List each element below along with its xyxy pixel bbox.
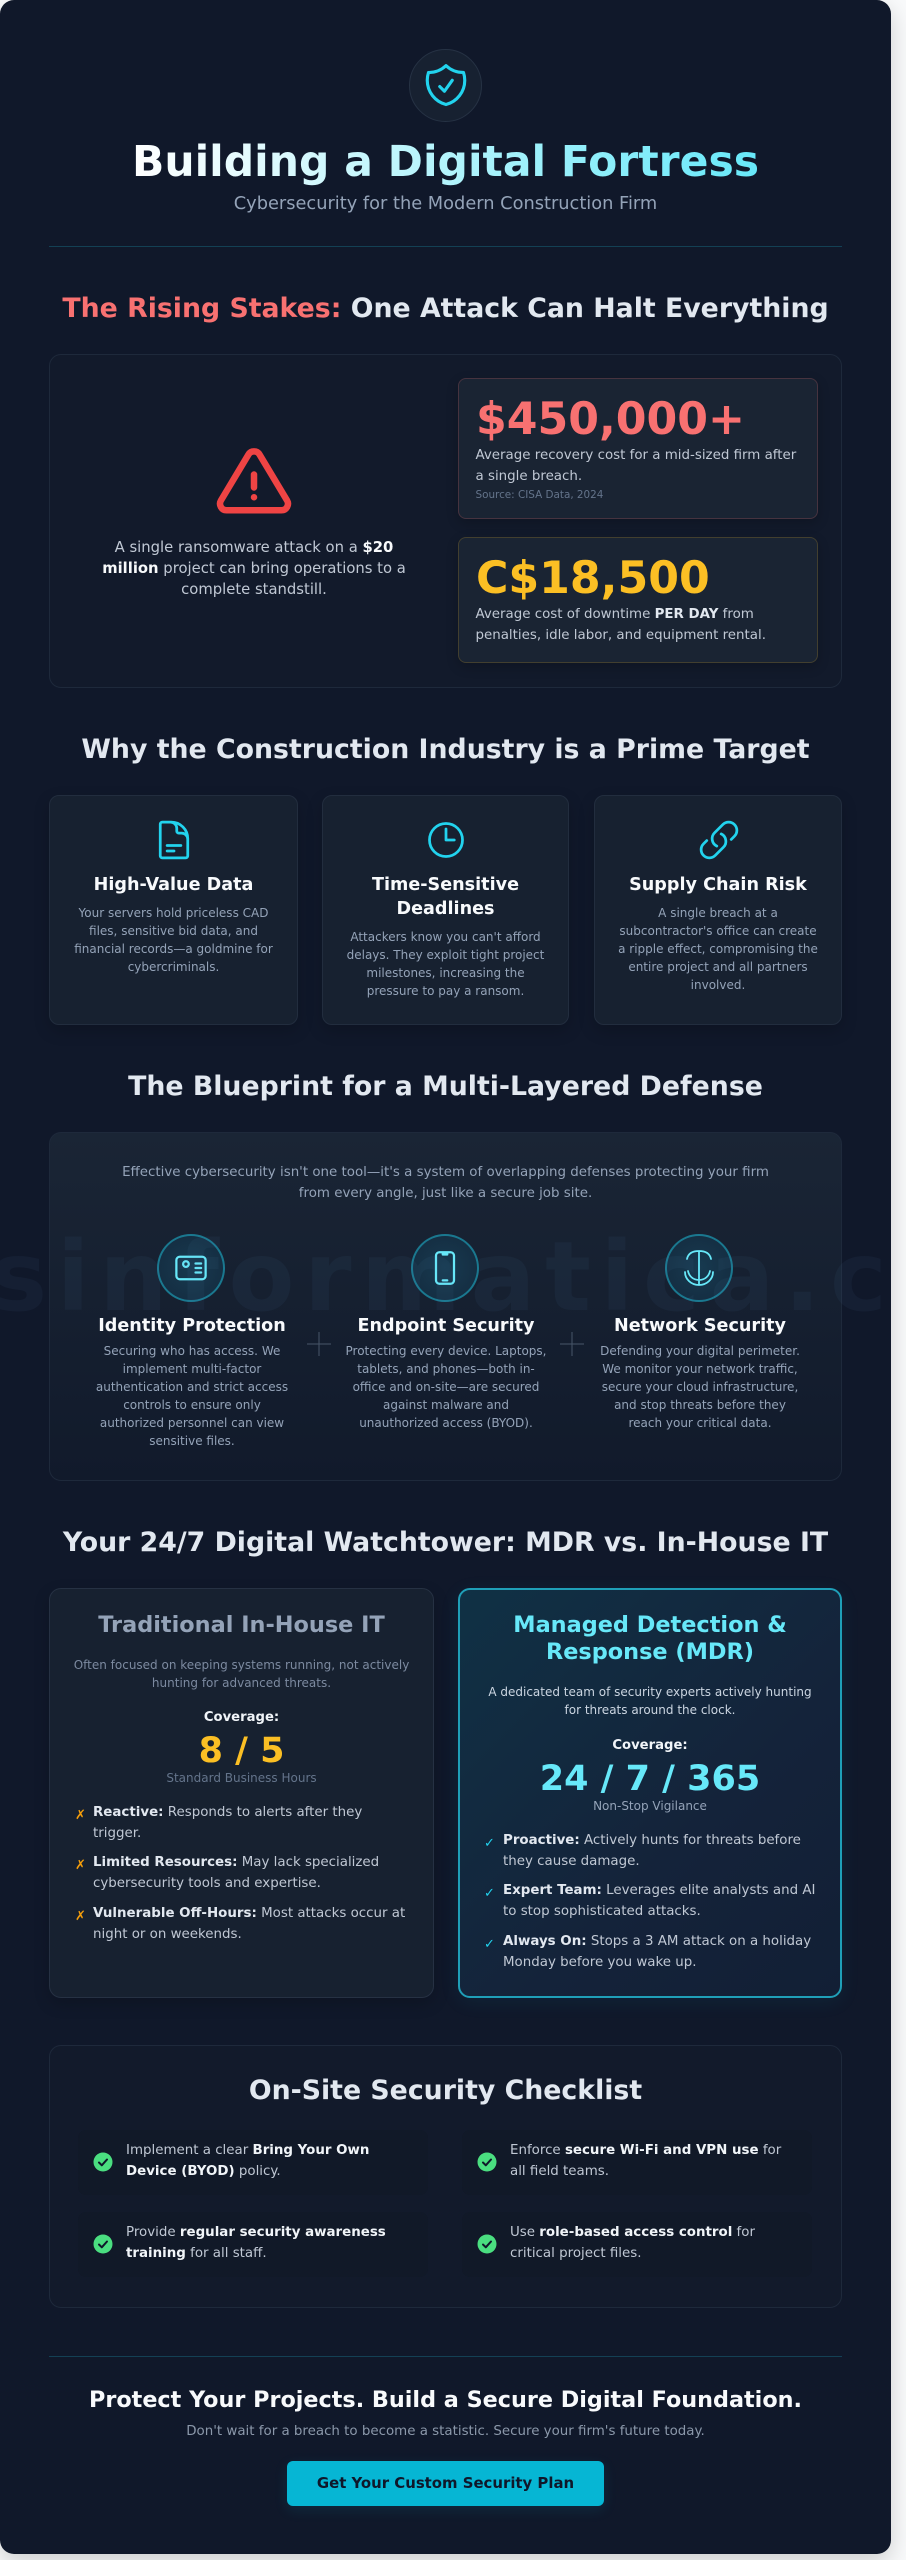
icon: id card — [157, 1234, 225, 1302]
panel description — [488, 1685, 812, 1717]
checklist item: training — [78, 2212, 428, 2277]
layer text: Defending your digital perimeter. — [600, 1344, 800, 1358]
stat description: Average cost of downtime PER DAY from — [476, 607, 754, 622]
bullet: always on: Always On: Stops a 3 AM attack on a holiday — [503, 1934, 811, 1949]
panel description: for threats around the clock. — [565, 1703, 735, 1717]
card text: delays. They exploit tight project — [347, 948, 544, 962]
card text: Attackers know you can't afford — [350, 930, 541, 944]
source note: Source: CISA Data, 2024 — [476, 489, 603, 501]
bullet: always on — [484, 1934, 811, 1970]
icon: clock — [428, 822, 464, 858]
text: ransomware statement: million project can bring operations to a — [102, 560, 406, 577]
item text: Implement a clear Bring Your Own — [126, 2143, 369, 2158]
panel: traditional in-house IT: ✗ — [75, 1808, 86, 1823]
card text: subcontractor's office can create — [619, 924, 817, 938]
coverage note: Standard Business Hours — [166, 1771, 317, 1785]
layer text — [600, 1344, 800, 1430]
bullet: always on: Monday before you wake up. — [503, 1955, 697, 1970]
card title — [372, 875, 519, 919]
stat description — [476, 607, 766, 643]
layer text — [96, 1344, 288, 1448]
card title: High-Value Data — [94, 875, 253, 895]
section heading: rising stakes: The Rising Stakes: One Attack Can Halt Everything — [62, 293, 829, 324]
footer heading: Protect Your Projects. Build a Secure Digital Foundation. — [89, 2387, 802, 2413]
icon: chain link — [700, 820, 738, 860]
layer text: sensitive files. — [149, 1434, 235, 1448]
item text: all field teams. — [510, 2164, 609, 2179]
card: deadlines — [322, 795, 569, 1025]
card text: a ripple effect, compromising the — [618, 942, 818, 956]
item text: training for all staff. — [126, 2246, 267, 2261]
panel title: Traditional In-House IT — [98, 1612, 385, 1638]
bullet: off-hours: night or on weekends. — [93, 1927, 242, 1942]
panel title: Managed Detection & — [513, 1612, 787, 1638]
card text: financial records—a goldmine for — [74, 942, 273, 956]
subtitle: Cybersecurity for the Modern Construction Firm — [234, 193, 657, 214]
panel description: hunting for advanced threats. — [152, 1676, 331, 1690]
layer: identity — [96, 1234, 288, 1448]
text: ransomware statement: A single ransomware attack on a $20 — [115, 539, 393, 556]
checklist item: BYOD — [78, 2130, 428, 2195]
icon: check — [478, 2234, 496, 2254]
layer text: Protecting every device. Laptops, — [346, 1344, 546, 1358]
panel: managed detection and response: ✓ — [484, 1886, 495, 1901]
bullet: proactive: Proactive: Actively hunts for threats before — [503, 1833, 801, 1848]
stat description: Average recovery cost for a mid-sized firm after — [476, 448, 796, 463]
layer text: against malware and — [383, 1398, 509, 1412]
intro text — [122, 1165, 769, 1201]
layer text — [346, 1344, 546, 1430]
bullet: reactive: Reactive: Responds to alerts after they — [93, 1805, 362, 1820]
item text: Provide regular security awareness — [126, 2225, 386, 2240]
panel description: Often focused on keeping systems running, not actively — [74, 1658, 409, 1672]
layer title: Endpoint Security — [357, 1316, 535, 1336]
stat description: penalties, idle labor, and equipment rental. — [476, 628, 766, 643]
panel: traditional in-house IT — [49, 1588, 434, 1998]
stat number: C$18,500 — [476, 553, 710, 604]
layer text: secure your cloud infrastructure, — [602, 1380, 798, 1394]
panel: traditional in-house IT: ✗ — [75, 1909, 86, 1924]
panel: on-site checklist — [49, 2045, 842, 2308]
layer text: controls to ensure only — [123, 1398, 261, 1412]
section heading: blueprint: The Blueprint for a Multi-Layered Defense — [128, 1071, 763, 1102]
coverage label: Coverage: — [204, 1710, 279, 1725]
card text: pressure to pay a ransom. — [367, 984, 524, 998]
card text: entire project and all partners — [628, 960, 808, 974]
bullet: reactive — [75, 1805, 362, 1841]
icon: document — [158, 820, 190, 860]
bullet: proactive: they cause damage. — [503, 1854, 640, 1869]
layer text: unauthorized access (BYOD). — [359, 1416, 533, 1430]
checklist item: wifi — [462, 2130, 812, 2195]
layer text: implement multi-factor — [123, 1362, 261, 1376]
title: Building a Digital Fortress — [132, 138, 759, 186]
section heading: watchtower: Your 24/7 Digital Watchtower: MDR vs. In-House IT — [63, 1527, 828, 1558]
coverage value: 8 / 5 — [199, 1731, 284, 1771]
icon: warning triangle — [216, 448, 292, 514]
layer text: authorized personnel can view — [100, 1416, 284, 1430]
icon: check — [94, 2234, 112, 2254]
layer title: Identity Protection — [98, 1316, 286, 1336]
panel: rising stakes — [49, 354, 842, 688]
card text: milestones, increasing the — [366, 966, 525, 980]
header icon: shield — [409, 49, 482, 122]
plus sign — [560, 1332, 584, 1356]
bullet: limited resources: cybersecurity tools and expertise. — [93, 1876, 321, 1891]
layer text: We monitor your network traffic, — [602, 1362, 798, 1376]
layer title: Network Security — [614, 1316, 786, 1336]
card: high-value data — [49, 795, 298, 1025]
text: ransomware statement — [102, 539, 406, 598]
icon: check — [94, 2152, 112, 2172]
bullet: expert team: to stop sophisticated attacks. — [503, 1904, 701, 1919]
card text: files, sensitive bid data, and — [89, 924, 258, 938]
bullet: off-hours: Vulnerable Off-Hours: Most attacks occur at — [93, 1906, 405, 1921]
icon: phone — [411, 1234, 479, 1302]
plus sign — [307, 1332, 331, 1356]
panel: multi-layered defense — [49, 1132, 842, 1481]
footer text: Don't wait for a breach to become a statistic. Secure your firm's future today. — [186, 2424, 705, 2439]
panel: managed detection and response: ✓ — [484, 1937, 495, 1952]
button: call to action — [287, 2461, 604, 2506]
coverage note: Non-Stop Vigilance — [593, 1799, 707, 1813]
card text — [74, 906, 273, 974]
layer text: tablets, and phones—both in- — [357, 1362, 535, 1376]
icon: check — [478, 2152, 496, 2172]
card: supply chain — [594, 795, 842, 1025]
card text — [618, 906, 818, 992]
checklist item: access control — [462, 2212, 812, 2277]
panel description — [74, 1658, 409, 1690]
item text — [126, 2225, 386, 2261]
item text — [510, 2143, 782, 2179]
item text: Use role-based access control for — [510, 2225, 755, 2240]
layer: network — [600, 1234, 800, 1430]
card title: Supply Chain Risk — [629, 875, 807, 895]
item text: critical project files. — [510, 2246, 641, 2261]
layer text: Securing who has access. We — [104, 1344, 280, 1358]
bullet: proactive — [484, 1833, 801, 1869]
bullet: expert team — [484, 1883, 815, 1919]
bullet: expert team: Expert Team: Leverages elite analysts and AI — [503, 1883, 815, 1898]
stat card: recovery cost — [458, 378, 818, 519]
panel: managed detection and response — [458, 1588, 842, 1998]
coverage label: Coverage: — [612, 1738, 688, 1753]
layer text: office and on-site—are secured — [353, 1380, 539, 1394]
layer text: reach your critical data. — [628, 1416, 772, 1430]
bullet: limited resources — [75, 1855, 379, 1891]
item text: Enforce secure Wi-Fi and VPN use for — [510, 2143, 781, 2158]
layer: endpoint — [346, 1234, 546, 1430]
card text — [347, 930, 544, 998]
card text: Your servers hold priceless CAD — [79, 906, 268, 920]
bullet: off-hours — [75, 1906, 405, 1942]
icon: network shield — [665, 1234, 733, 1302]
panel description: A dedicated team of security experts actively hunting — [488, 1685, 812, 1699]
stat card: downtime cost — [458, 537, 818, 663]
text: ransomware statement: complete standstill. — [181, 581, 327, 598]
card text: involved. — [691, 978, 745, 992]
card title: Deadlines — [396, 899, 494, 919]
panel: traditional in-house IT: ✗ — [75, 1858, 86, 1873]
panel: managed detection and response: ✓ — [484, 1836, 495, 1851]
item text — [510, 2225, 755, 2261]
stat description — [476, 448, 796, 484]
layer text: and stop threats before they — [614, 1398, 786, 1412]
card title: Time-Sensitive — [372, 875, 519, 895]
stat description: a single breach. — [476, 469, 582, 484]
bullet: reactive: trigger. — [93, 1826, 141, 1841]
coverage value: 24 / 7 / 365 — [540, 1759, 760, 1799]
intro text: Effective cybersecurity isn't one tool—it's a system of overlapping defenses protecting your firm — [122, 1165, 769, 1180]
checklist heading: On-Site Security Checklist — [249, 2075, 642, 2106]
intro text: from every angle, just like a secure job site. — [299, 1186, 592, 1201]
layer text: authentication and strict access — [96, 1380, 288, 1394]
button: call to action: Get Your Custom Security Plan — [317, 2474, 574, 2492]
item text: Device (BYOD) policy. — [126, 2164, 281, 2179]
bullet: limited resources: Limited Resources: May lack specialized — [93, 1855, 379, 1870]
item text — [126, 2143, 369, 2179]
card text: A single breach at a — [658, 906, 778, 920]
section heading: prime target: Why the Construction Industry is a Prime Target — [81, 734, 810, 765]
card text: cybercriminals. — [128, 960, 219, 974]
stat number: $450,000+ — [476, 394, 745, 445]
panel title: Response (MDR) — [546, 1639, 754, 1665]
panel title — [513, 1612, 787, 1665]
